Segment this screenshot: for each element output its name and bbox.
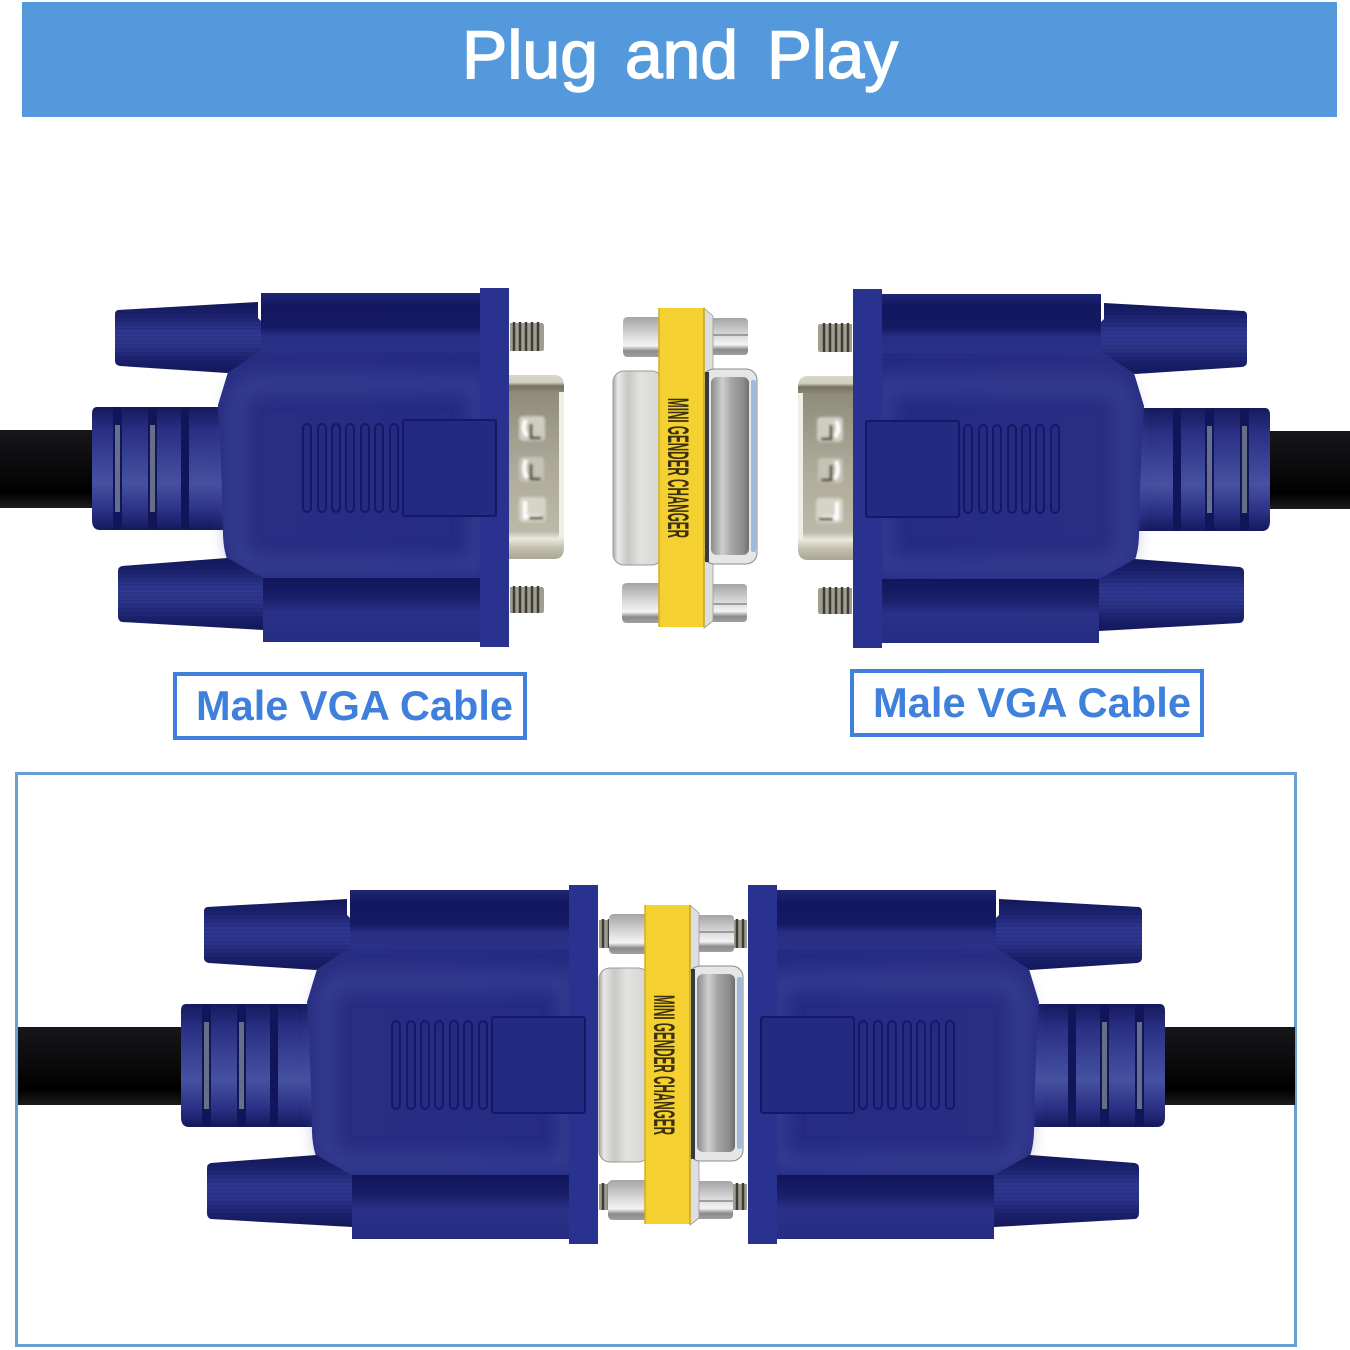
title: Plug and Play: Plug: [462, 17, 598, 93]
title banner: [22, 2, 1337, 117]
left cable with male VGA connector: [0, 288, 564, 647]
label: left Male VGA Cable: Male VGA Cable: [196, 682, 513, 729]
mini gender changer adapter: [613, 308, 757, 628]
left cable connected: [18, 885, 633, 1244]
title: Plug and Play: and: [625, 17, 738, 93]
label: left Male VGA Cable: [175, 674, 525, 738]
panel: connected cables: [16, 774, 1296, 1346]
right cable with male VGA connector: [798, 289, 1350, 648]
gender changer joining both connectors: [599, 905, 743, 1225]
label: right Male VGA Cable: [852, 671, 1202, 735]
right cable connected: [713, 885, 1295, 1244]
title: Plug and Play: Play: [767, 17, 898, 93]
label: right Male VGA Cable: Male VGA Cable: [873, 679, 1191, 726]
title: Plug and Play: [462, 17, 898, 93]
